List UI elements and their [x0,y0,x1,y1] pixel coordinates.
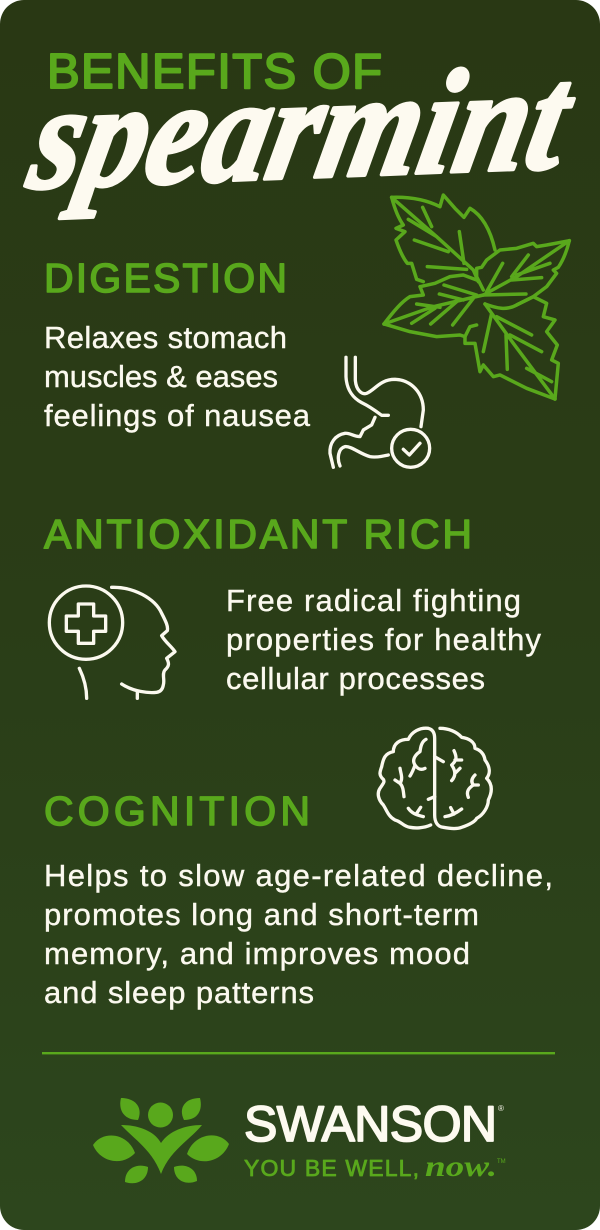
text: antioxidant body [226,583,542,696]
logo: swanson wordmark: now. [425,1150,497,1183]
heading: antioxidant rich: ANTIOXIDANT RICH [44,511,472,557]
text: cognition body: promotes long and short-term [44,897,479,932]
icon: head with medical cross [49,586,175,698]
logo: swanson wordmark: YOU BE WELL, [244,1155,419,1181]
text: digestion body: feelings of nausea [44,398,311,433]
text: antioxidant body: properties for healthy [226,622,542,657]
text: cognition body: memory, and improves mood [44,936,470,971]
text: digestion body [44,320,311,433]
logo: swanson wordmark: TM [497,1159,506,1165]
heading: digestion: DIGESTION [44,255,287,301]
text: digestion body: Relaxes stomach [44,320,287,355]
text: digestion body: muscles & eases [44,359,278,394]
logo: swanson emblem [93,1098,229,1183]
logo: swanson wordmark: SWANSON [244,1096,497,1152]
title [17,34,588,221]
text: cognition body [44,858,553,1010]
icon: stomach [330,357,430,467]
icon: mint leaves [384,195,569,399]
title line: benefits of: BENEFITS OF [47,45,382,99]
icon: brain [378,728,491,829]
heading: cognition: COGNITION [44,788,310,834]
text: cognition body: and sleep patterns [44,975,314,1010]
logo: swanson wordmark: ® [498,1104,504,1113]
text: cognition body: Helps to slow age-related decline, [44,858,553,893]
logo: swanson wordmark [244,1096,506,1183]
text: antioxidant body: Free radical fighting [226,583,521,618]
text: antioxidant body: cellular processes [226,661,485,696]
